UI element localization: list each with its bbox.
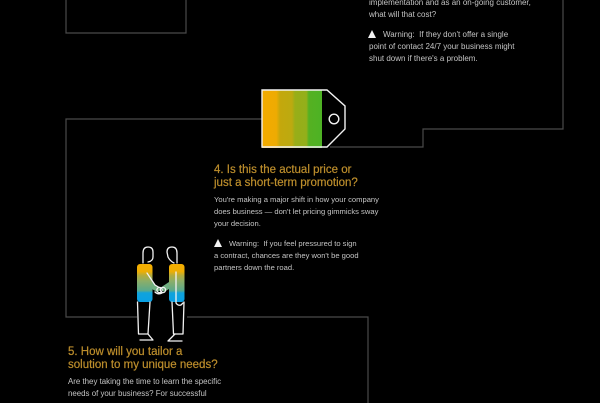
heading: question 5 [68, 346, 218, 371]
warning: question 4: Warning: If you feel pressured to sign [229, 239, 357, 248]
text block: question 4 body: your decision. [214, 219, 261, 228]
warning: question 3: shut down if there's a problem. [369, 54, 478, 63]
text block: question 4 body [214, 195, 379, 228]
warning: question 3 [368, 30, 514, 63]
warning: question 4: a contract, chances are they won't be good [214, 251, 359, 260]
heading: question 4: just a short-term promotion? [214, 177, 358, 189]
warning: question 4 [214, 239, 359, 272]
text block: question 4 body: You're making a major shift in how your company [214, 195, 379, 204]
warning: question 3: point of contact 24/7 your business might [369, 42, 514, 51]
heading: question 4 [214, 164, 358, 189]
text block: question 3 continuation [369, 0, 531, 19]
heading: question 5: solution to my unique needs? [68, 359, 218, 371]
text block: question 4 body: does business — don't let pricing gimmicks sway [214, 207, 378, 216]
text block: question 5 body [68, 377, 221, 398]
warning: question 4: partners down the road. [214, 263, 294, 272]
text block: question 5 body: needs of your business? For successful [68, 389, 207, 398]
text block: question 5 body: Are they taking the time to learn the specific [68, 377, 221, 386]
heading: question 5: 5. How will you tailor a [68, 346, 182, 358]
warning: question 3: Warning: If they don't offer a single [383, 30, 508, 39]
heading: question 4: 4. Is this the actual price or [214, 164, 351, 176]
text block: question 3 continuation: what will that cost? [369, 10, 436, 19]
